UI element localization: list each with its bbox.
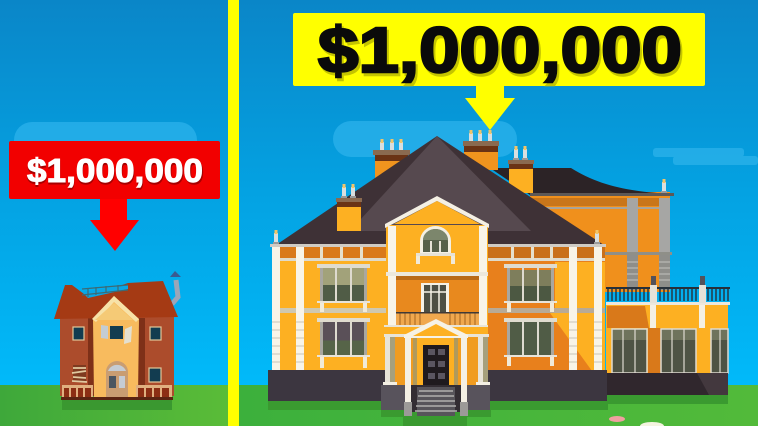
steps and base xyxy=(381,385,490,416)
front chimney xyxy=(273,184,600,244)
small run-down house xyxy=(54,271,181,410)
left wing wall xyxy=(270,244,386,371)
terrace railing xyxy=(606,276,730,303)
grass xyxy=(0,385,758,426)
red price label with arrow: $1,000,000 xyxy=(27,154,204,191)
porch rails xyxy=(62,385,172,398)
porch entablature xyxy=(384,325,488,337)
main roof xyxy=(276,136,604,245)
gable front xyxy=(93,296,139,397)
yellow price label with arrow: $1,000,000 xyxy=(320,17,684,89)
porch body xyxy=(383,337,490,385)
red price label with arrow xyxy=(9,141,220,251)
front door xyxy=(423,345,449,385)
ground shadow xyxy=(268,394,728,426)
brick walls xyxy=(60,316,174,396)
back wing xyxy=(490,168,674,292)
back wing roof xyxy=(490,168,674,195)
porch columns xyxy=(404,337,468,416)
red price label with arrow: $1,000,000 xyxy=(27,152,203,189)
clouds xyxy=(14,121,758,172)
windows xyxy=(73,327,161,382)
yellow price label with arrow xyxy=(293,13,705,130)
chimney pipe xyxy=(170,271,181,304)
boarded window xyxy=(72,365,87,382)
gable pediment xyxy=(385,196,489,228)
door xyxy=(106,361,128,397)
terrace base xyxy=(606,373,728,395)
brick basement xyxy=(268,370,607,401)
yellow price label with arrow: $1,000,000 xyxy=(318,14,682,86)
roof xyxy=(54,281,178,319)
mansion xyxy=(268,130,730,426)
divider xyxy=(228,0,239,426)
terrace wing xyxy=(606,276,730,395)
arched window xyxy=(416,226,455,264)
chimneys behind roof xyxy=(373,130,534,193)
central bay xyxy=(381,196,490,416)
balcony recess xyxy=(386,272,488,325)
right wing wall xyxy=(484,244,606,371)
porch pediment xyxy=(404,319,468,338)
